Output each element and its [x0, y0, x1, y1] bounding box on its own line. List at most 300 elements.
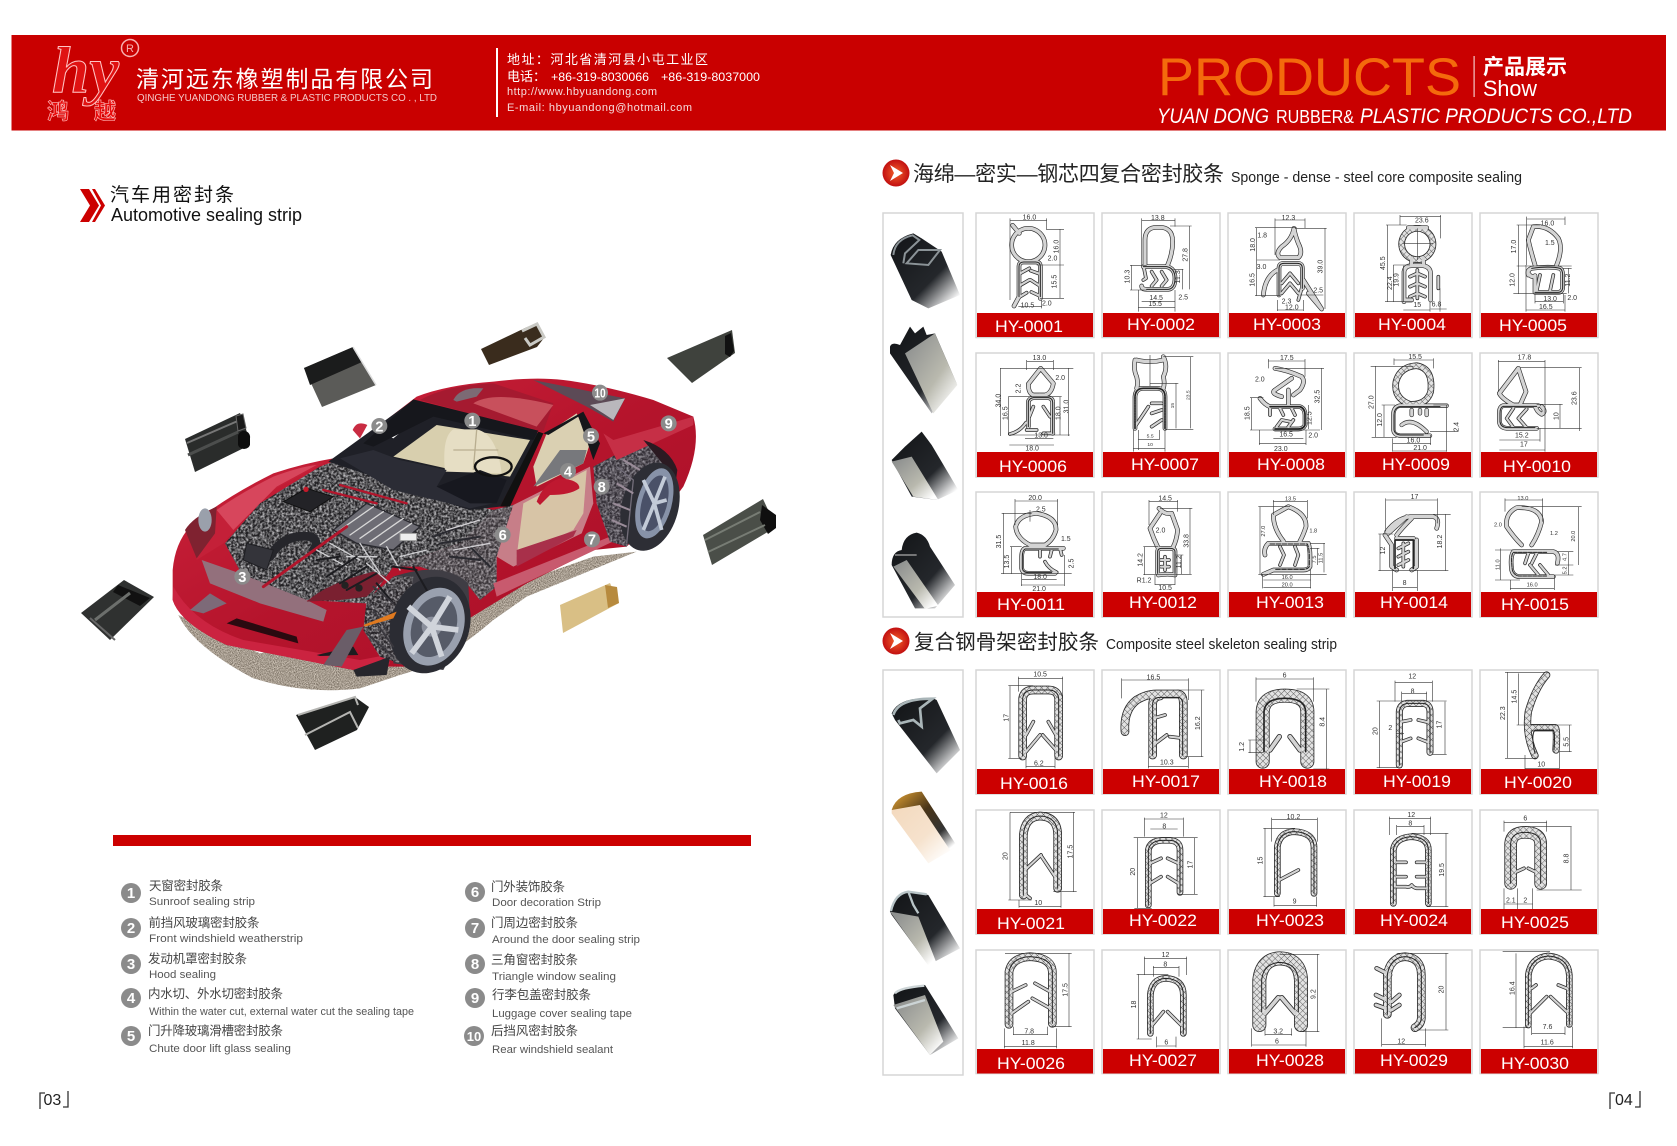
- header band: [12, 34, 1666, 130]
- legend item 2: 前挡风玻璃密封胶条: [148, 915, 260, 930]
- card HY-0009: HY-0009: [1382, 455, 1450, 474]
- legend item 8: [465, 952, 616, 983]
- card HY-0013: [1228, 492, 1346, 617]
- products title: [1157, 48, 1632, 128]
- card HY-0016: 10.5: [1033, 672, 1047, 679]
- card HY-0025: [1480, 810, 1598, 934]
- card HY-0019: 17: [1437, 720, 1444, 728]
- card HY-0001: HY-0001: [995, 317, 1063, 336]
- card HY-0028: 3.2: [1273, 1028, 1283, 1035]
- card HY-0028: 9.2: [1310, 989, 1317, 999]
- number badges: 6: [499, 528, 507, 544]
- company name: 清河远东橡塑制品有限公司: [136, 66, 433, 92]
- card HY-0001: 2.0: [1048, 256, 1057, 263]
- card HY-0020: [1480, 670, 1598, 794]
- card HY-0007: 15: [1170, 403, 1176, 408]
- card HY-0007: 5.5: [1147, 433, 1154, 439]
- card HY-0009: 27.0: [1368, 395, 1375, 409]
- left heading: automotive sealing strip: [80, 184, 302, 225]
- card HY-0013: 16.0: [1282, 575, 1293, 581]
- card HY-0012: 14.5: [1158, 496, 1172, 503]
- card HY-0009: 12.0: [1377, 413, 1384, 427]
- number badges: 2: [375, 419, 383, 435]
- card HY-0008: 16.5: [1279, 432, 1293, 439]
- logo: 鸿: [47, 99, 69, 124]
- page number 03: 03: [44, 1092, 61, 1109]
- card HY-0015: 1.2: [1550, 531, 1558, 537]
- card HY-0003: 2.5: [1313, 287, 1323, 294]
- card HY-0004: [1354, 213, 1472, 338]
- card HY-0030: [1480, 950, 1598, 1074]
- card HY-0015: 5.2: [1563, 566, 1569, 574]
- card HY-0003: HY-0003: [1253, 315, 1321, 334]
- card HY-0005: 17.0: [1511, 240, 1518, 253]
- section heading: composite steel skeleton: [882, 628, 1337, 654]
- legend item 3: 3: [127, 956, 135, 973]
- card HY-0009: 2.4: [1453, 422, 1460, 432]
- card HY-0017: 16.5: [1147, 674, 1160, 681]
- card HY-0012: R1.2: [1137, 577, 1152, 584]
- card HY-0010: HY-0010: [1503, 457, 1571, 476]
- card HY-0022: 20: [1130, 868, 1137, 876]
- card HY-0008: 23.0: [1274, 446, 1288, 453]
- card HY-0025: 2.1: [1506, 898, 1516, 905]
- number badges: 8: [598, 480, 606, 496]
- card HY-0015: 13.0: [1517, 496, 1528, 502]
- card HY-0020: 5.5: [1563, 737, 1570, 747]
- card HY-0030: HY-0030: [1501, 1054, 1569, 1073]
- card HY-0003: 18.0: [1250, 238, 1257, 252]
- card HY-0001: 10.5: [1021, 302, 1034, 309]
- strip photo 6: [892, 792, 957, 863]
- card HY-0019: HY-0019: [1383, 772, 1451, 791]
- legend item 10: 后挡风密封胶条: [491, 1023, 578, 1038]
- card HY-0003: 1.8: [1257, 233, 1267, 240]
- card HY-0025: 2: [1523, 898, 1527, 905]
- legend item 8: Triangle window sealing: [492, 971, 616, 983]
- card HY-0004: HY-0004: [1378, 315, 1446, 334]
- card HY-0027: 18: [1131, 1000, 1138, 1008]
- card HY-0024: 8: [1408, 821, 1412, 828]
- card HY-0003: 16.5: [1250, 273, 1257, 287]
- card HY-0012: 2.0: [1156, 527, 1165, 534]
- card HY-0030: 11.6: [1541, 1039, 1554, 1046]
- card HY-0007: HY-0007: [1131, 455, 1199, 474]
- card HY-0019: 2: [1388, 725, 1392, 732]
- card HY-0008: 17.5: [1280, 355, 1294, 362]
- card HY-0013: HY-0013: [1256, 593, 1324, 612]
- legend item 9: 9: [471, 990, 479, 1007]
- legend item 5: [121, 1023, 291, 1055]
- card HY-0019: 8: [1411, 688, 1415, 695]
- card HY-0002: 27.8: [1182, 248, 1189, 262]
- products title: PRODUCTS: [1158, 48, 1461, 107]
- card HY-0002: HY-0002: [1127, 315, 1195, 334]
- card HY-0011: 18.0: [1033, 574, 1047, 581]
- card HY-0011: 2.5: [1036, 507, 1046, 514]
- card HY-0014: 17: [1411, 494, 1419, 501]
- card HY-0024: [1354, 810, 1472, 934]
- card HY-0022: HY-0022: [1129, 911, 1197, 930]
- contact details: 地址：河北省清河县小屯工业区: [507, 52, 708, 67]
- card HY-0005: HY-0005: [1499, 316, 1567, 335]
- card HY-0006: 13.0: [1033, 355, 1046, 362]
- card HY-0001: [976, 213, 1094, 338]
- legend item 2: 2: [127, 920, 135, 937]
- card HY-0009: 15.5: [1408, 354, 1422, 361]
- card HY-0028: 6: [1275, 1039, 1279, 1046]
- card HY-0023: 10.2: [1287, 814, 1300, 821]
- front wheel: [376, 565, 484, 685]
- card HY-0006: 31.0: [1063, 400, 1070, 413]
- legend item 3: Hood sealing: [149, 969, 216, 981]
- card HY-0006: 34.0: [996, 394, 1003, 407]
- card HY-0008: [1228, 353, 1346, 477]
- legend item 10: Rear windshield sealant: [492, 1044, 613, 1056]
- strip photos around the car: [81, 323, 776, 750]
- card HY-0013: 27.0: [1261, 526, 1267, 537]
- card HY-0005: 1.5: [1545, 240, 1555, 247]
- page number 04: 04: [1615, 1092, 1633, 1109]
- card HY-0003: [1228, 213, 1346, 338]
- card HY-0003: 12.3: [1282, 215, 1295, 222]
- card HY-0018: HY-0018: [1259, 772, 1327, 791]
- card HY-0019: 12: [1408, 673, 1416, 680]
- legend item 5: Chute door lift glass sealing: [149, 1043, 291, 1055]
- card HY-0008: 12.5: [1307, 411, 1314, 425]
- strip photo 1: [891, 233, 960, 308]
- card HY-0029: 12: [1397, 1038, 1405, 1045]
- card HY-0005: 11.2: [1565, 273, 1572, 287]
- card HY-0002: 11.3: [1175, 270, 1182, 283]
- products title: PLASTIC PRODUCTS CO.,LTD: [1360, 105, 1632, 128]
- card HY-0008: 2.0: [1255, 377, 1265, 384]
- card HY-0002: 10.3: [1124, 270, 1131, 283]
- legend item 6: [465, 879, 601, 909]
- card HY-0026: 7.8: [1024, 1028, 1034, 1035]
- card HY-0006: 18.0: [1025, 446, 1039, 453]
- card HY-0012: 14.2: [1137, 553, 1144, 567]
- legend item 10: 10: [467, 1029, 481, 1044]
- legend item 1: 1: [127, 885, 135, 902]
- card HY-0011: 1.5: [1061, 536, 1071, 543]
- company name: QINGHE YUANDONG RUBBER & PLASTIC PRODUCTS CO . , LTD: [137, 93, 437, 104]
- card HY-0020: 22.3: [1500, 706, 1507, 720]
- card HY-0017: 10.3: [1160, 760, 1174, 767]
- card HY-0014: 18.2: [1437, 535, 1444, 548]
- legend item 6: Door decoration Strip: [492, 897, 601, 909]
- card HY-0010: 23.6: [1572, 391, 1579, 405]
- card HY-0005: 16.5: [1539, 304, 1553, 311]
- card HY-0005: [1480, 213, 1598, 338]
- card HY-0019: 20: [1372, 727, 1379, 735]
- page number 04: [1610, 1091, 1640, 1109]
- photo panel 2: [883, 670, 963, 1075]
- number badges: 4: [564, 464, 573, 480]
- legend: right column: [464, 879, 640, 1056]
- card HY-0028: HY-0028: [1256, 1051, 1324, 1070]
- card HY-0001: 16.0: [1053, 240, 1060, 253]
- strip: bottom: [296, 697, 369, 750]
- card HY-0006: 18.0: [1056, 406, 1063, 420]
- strip: brown top: [481, 323, 544, 365]
- card HY-0002: [1102, 213, 1220, 338]
- card HY-0013: 13.5: [1285, 496, 1296, 502]
- card HY-0009: 16.0: [1407, 437, 1420, 444]
- card HY-0002: 14.5: [1149, 295, 1163, 302]
- legend item 6: 6: [471, 884, 479, 901]
- strip: top right: [667, 330, 735, 383]
- contact details: +86-319-8037000: [661, 70, 760, 84]
- card HY-0010: 10: [1553, 412, 1560, 420]
- card HY-0025: 8.8: [1563, 854, 1570, 863]
- card HY-0011: [976, 492, 1094, 617]
- legend item 8: 8: [471, 956, 479, 973]
- card HY-0006: 16.5: [1002, 406, 1009, 420]
- legend item 7: [465, 915, 640, 946]
- card HY-0008: HY-0008: [1257, 455, 1325, 474]
- card HY-0019: [1354, 670, 1472, 794]
- card HY-0006: 13.0: [1034, 432, 1048, 439]
- legend item 10: [464, 1023, 613, 1056]
- card HY-0022: [1102, 810, 1220, 934]
- legend item 5: 5: [127, 1028, 135, 1045]
- card HY-0010: 17.8: [1518, 354, 1531, 361]
- card HY-0012: 10.5: [1158, 585, 1172, 592]
- card HY-0025: HY-0025: [1501, 913, 1569, 932]
- card HY-0014: [1354, 492, 1472, 617]
- card HY-0023: [1228, 810, 1346, 934]
- card HY-0014: 12: [1380, 546, 1387, 554]
- card HY-0024: 12: [1407, 812, 1415, 819]
- card HY-0016: 17: [1003, 714, 1010, 722]
- card HY-0005: 13.0: [1543, 296, 1557, 303]
- card HY-0003: 39.0: [1318, 260, 1325, 273]
- card HY-0014: HY-0014: [1380, 593, 1448, 612]
- legend: left column: [121, 878, 414, 1055]
- legend item 6: 门外装饰胶条: [491, 879, 565, 894]
- legend item 7: Around the door sealing strip: [492, 934, 640, 946]
- card HY-0015: [1480, 492, 1598, 617]
- card HY-0006: 2.2: [1016, 384, 1023, 393]
- card HY-0023: 9: [1293, 899, 1297, 906]
- card HY-0013: 11.5: [1319, 553, 1325, 563]
- card HY-0015: 2.0: [1494, 523, 1502, 529]
- card HY-0011: 21.0: [1032, 586, 1046, 593]
- card HY-0010: 15.2: [1515, 433, 1529, 440]
- card HY-0030: 16.4: [1510, 981, 1517, 995]
- card HY-0015: 4.7: [1563, 553, 1569, 561]
- card HY-0012: 11.2: [1176, 555, 1183, 568]
- card HY-0005: 16.0: [1541, 221, 1554, 228]
- card HY-0011: 2.5: [1068, 559, 1075, 568]
- legend item 5: 门升降玻璃滑槽密封胶条: [148, 1023, 283, 1038]
- card HY-0008: 2.0: [1308, 433, 1318, 440]
- legend item 9: Luggage cover sealing tape: [492, 1008, 632, 1020]
- card HY-0022: 12: [1160, 813, 1168, 820]
- card HY-0004: 19.9: [1394, 273, 1401, 287]
- card HY-0025: 6: [1523, 815, 1527, 822]
- card HY-0001: 16.0: [1023, 214, 1036, 221]
- engine texture: [225, 462, 513, 603]
- card HY-0007: 10: [1147, 442, 1153, 448]
- legend item 8: 三角窗密封胶条: [491, 952, 578, 967]
- products title: 产品展示: [1483, 56, 1567, 79]
- products title: YUAN DONG: [1157, 105, 1269, 128]
- legend item 2: [121, 915, 303, 945]
- card HY-0027: [1102, 950, 1220, 1074]
- card HY-0023: 15: [1258, 856, 1265, 864]
- products title: RUBBER&: [1276, 107, 1354, 127]
- left heading: automotive sealing strip: 汽车用密封条: [110, 184, 234, 206]
- section heading: composite steel skeleton: 复合钢骨架密封胶条: [914, 631, 1099, 654]
- legend item 4: Within the water cut, external water cut the sealing tape: [149, 1006, 414, 1018]
- card HY-0017: 16.2: [1195, 716, 1202, 730]
- card HY-0022: 17: [1187, 860, 1194, 868]
- card HY-0009: [1354, 353, 1472, 477]
- strip photo 5: [892, 698, 960, 773]
- card HY-0018: 1.2: [1239, 742, 1246, 752]
- card HY-0004: 22.4: [1387, 276, 1394, 290]
- card HY-0027: 12: [1162, 952, 1170, 959]
- legend item 4: 4: [127, 990, 136, 1007]
- number badges: 5: [587, 429, 595, 445]
- card HY-0013: 7.5: [1312, 555, 1318, 563]
- number badges: 9: [665, 417, 673, 433]
- strip: lower left: [81, 580, 154, 640]
- card HY-0007: [1102, 353, 1220, 477]
- card HY-0002: 2.5: [1178, 294, 1188, 301]
- card HY-0012: [1102, 492, 1220, 617]
- card HY-0013: 1.8: [1309, 528, 1317, 534]
- card HY-0012: HY-0012: [1129, 593, 1197, 612]
- card HY-0016: HY-0016: [1000, 774, 1068, 793]
- products title: Show: [1483, 76, 1537, 101]
- legend item 7: 门周边密封胶条: [491, 915, 578, 930]
- section heading: sponge dense steel core: 海绵—密实—钢芯四复合密封胶条: [913, 163, 1224, 186]
- card HY-0018: 8.4: [1320, 717, 1327, 727]
- logo: hy: [52, 34, 120, 107]
- strip photo 2: [890, 327, 957, 413]
- section heading: sponge dense steel core: [882, 160, 1522, 186]
- card HY-0008: 32.5: [1314, 390, 1321, 403]
- card HY-0024: HY-0024: [1380, 911, 1448, 930]
- legend item 4: [121, 986, 414, 1018]
- card HY-0028: [1228, 950, 1346, 1074]
- card HY-0011: 13.5: [1004, 555, 1011, 568]
- contact details: http://www.hbyuandong.com: [507, 86, 657, 98]
- strip photo 4: [892, 533, 955, 609]
- legend item 1: 天窗密封胶条: [149, 878, 223, 893]
- strip photo 3: [892, 432, 958, 500]
- card HY-0011: HY-0011: [997, 595, 1065, 614]
- card HY-0007: 23.5: [1185, 390, 1191, 400]
- strip photo 8: [893, 985, 958, 1055]
- strip: grey upper left: [304, 347, 376, 407]
- card HY-0010: [1480, 353, 1598, 477]
- page number 03: [40, 1091, 68, 1109]
- engine details: [243, 485, 490, 657]
- card HY-0002: 13.8: [1151, 215, 1165, 222]
- rear wheel: [611, 456, 689, 557]
- strip: right: [703, 499, 776, 565]
- legend item 7: 7: [471, 920, 479, 937]
- logo: 越: [94, 99, 116, 124]
- strip: cream: [560, 583, 619, 633]
- headlight: [185, 507, 217, 558]
- card HY-0021: [976, 810, 1094, 934]
- contact details: E-mail: hbyuandong@hotmail.com: [507, 102, 692, 114]
- red divider bar: [113, 835, 751, 846]
- card HY-0030: 7.6: [1543, 1024, 1552, 1031]
- number badges: 7: [588, 533, 596, 549]
- card HY-0026: HY-0026: [997, 1054, 1065, 1073]
- card HY-0024: 19.5: [1439, 863, 1446, 877]
- card HY-0015: 11.0: [1495, 559, 1501, 570]
- card HY-0004: 23.6: [1415, 217, 1429, 224]
- photo panel 1: [883, 213, 963, 617]
- number badges: [234, 385, 677, 586]
- contact details: 电话：: [507, 69, 546, 84]
- card HY-0004: 15: [1413, 302, 1421, 309]
- card HY-0029: HY-0029: [1380, 1051, 1448, 1070]
- card HY-0026: 17.5: [1063, 983, 1070, 997]
- card HY-0016: [976, 670, 1094, 794]
- mirrors: [537, 478, 579, 505]
- card HY-0016: 6.2: [1034, 761, 1044, 768]
- card HY-0021: 20: [1003, 852, 1010, 860]
- card HY-0004: 6.8: [1432, 301, 1441, 308]
- card HY-0001: 15.5: [1052, 275, 1059, 288]
- legend item 2: Front windshield weatherstrip: [149, 933, 303, 945]
- strip photo 7: [890, 891, 960, 966]
- card HY-0020: 14.5: [1512, 690, 1519, 703]
- number badges: 10: [594, 387, 606, 401]
- card HY-0027: 6: [1164, 1039, 1168, 1046]
- card HY-0022: 8: [1162, 823, 1166, 830]
- card HY-0002: 15.5: [1148, 301, 1162, 308]
- card HY-0014: 8: [1403, 580, 1407, 587]
- card HY-0008: 18.5: [1244, 406, 1251, 420]
- card HY-0012: 33.8: [1183, 534, 1190, 548]
- legend item 4: 内水切、外水切密封胶条: [148, 986, 283, 1001]
- card HY-0023: HY-0023: [1256, 911, 1324, 930]
- car illustration: [173, 379, 696, 690]
- card HY-0021: 17.5: [1067, 845, 1074, 858]
- card HY-0026: [976, 950, 1094, 1074]
- card HY-0011: 31.5: [996, 535, 1003, 548]
- card HY-0003: 2.3: [1282, 299, 1291, 306]
- card HY-0020: 10: [1537, 762, 1545, 769]
- number badges: 3: [238, 570, 246, 586]
- legend item 3: [121, 951, 247, 981]
- card HY-0029: [1354, 950, 1472, 1074]
- contact details: [507, 52, 760, 114]
- contact details: +86-319-8030066: [551, 70, 649, 84]
- card HY-0017: HY-0017: [1132, 772, 1200, 791]
- card HY-0026: 11.8: [1022, 1040, 1035, 1047]
- card HY-0003: 12.0: [1285, 305, 1299, 312]
- card HY-0006: [976, 353, 1094, 477]
- section heading: composite steel skeleton: Composite steel skeleton sealing strip: [1106, 637, 1337, 653]
- section heading: sponge dense steel core: Sponge - dense - steel core composite sealing: [1231, 170, 1522, 186]
- card HY-0005: 2.0: [1567, 295, 1577, 302]
- card HY-0009: 21.0: [1413, 445, 1427, 452]
- legend item 1: [121, 878, 255, 908]
- card HY-0021: HY-0021: [997, 914, 1065, 933]
- logo: R: [126, 43, 134, 55]
- legend item 9: 行李包盖密封胶条: [492, 987, 591, 1002]
